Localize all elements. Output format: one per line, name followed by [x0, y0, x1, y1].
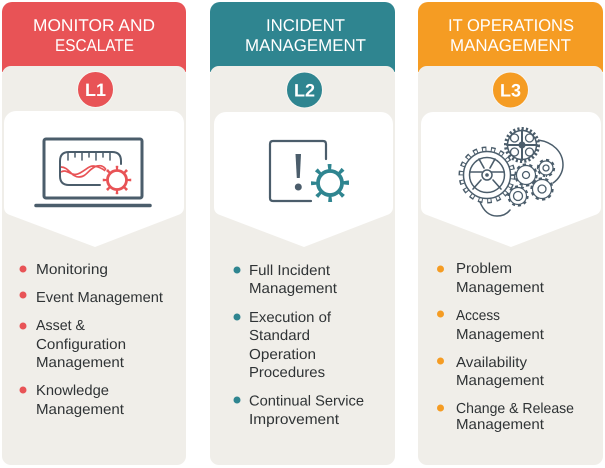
L1 list: Asset &: [36, 318, 85, 334]
L2 list: Management: [249, 281, 337, 297]
small gear lower right: [532, 178, 552, 200]
small gear bottom: [508, 186, 528, 206]
L2 white icon panel: [214, 112, 393, 247]
L3 list: Change & Release: [456, 401, 574, 417]
L1 list: Monitoring: [36, 262, 108, 278]
L2 heading: [245, 16, 366, 55]
top gear: [505, 128, 539, 162]
big gear: [461, 149, 513, 201]
L3 list: [437, 261, 574, 433]
L3 badge: [492, 72, 528, 108]
L2 badge: L2: [294, 80, 315, 100]
L3 list: Access: [456, 308, 500, 324]
L3 heading: MANAGEMENT: [450, 36, 571, 55]
icon: alert document with gear: [270, 141, 346, 201]
L3 list: Management: [456, 280, 544, 296]
panel: L1 monitor and escalate: [2, 2, 186, 465]
L3 list: Management: [456, 417, 544, 433]
L1 list: Management: [36, 355, 124, 371]
L2 list: Standard: [249, 328, 310, 344]
L1 list: Event Management: [36, 290, 163, 306]
L3 list: Availability: [456, 355, 528, 371]
small gear right: [538, 160, 554, 176]
L1 badge: L1: [85, 80, 106, 100]
L2 heading: INCIDENT: [266, 16, 345, 35]
L1 list: [20, 262, 163, 418]
L2 list: Improvement: [249, 412, 339, 428]
L3 list: Problem: [456, 261, 512, 277]
L1 list: Management: [36, 402, 124, 418]
L2 list: Operation: [249, 347, 316, 363]
L2 list: Continual Service: [249, 394, 364, 410]
L1 white icon panel: [4, 111, 184, 247]
L3 header band: [418, 2, 603, 72]
L1 list: Knowledge: [36, 383, 109, 399]
L1 list: Configuration: [36, 337, 126, 353]
L1 heading: MONITOR AND: [33, 16, 155, 35]
panel: L2 incident management: [210, 2, 395, 465]
L2 body background: [210, 66, 395, 465]
L2 list: [234, 263, 364, 428]
L1 header band: [2, 2, 186, 72]
L3 heading: [448, 16, 574, 55]
L2 header band: [210, 2, 395, 72]
L3 body background: [418, 66, 603, 465]
L2 list: Execution of: [249, 310, 332, 326]
L3 list: Management: [456, 373, 544, 389]
icon: cluster of gears: [461, 128, 563, 216]
L1 badge: [78, 72, 114, 108]
L2 list: Procedures: [249, 365, 325, 381]
L3 list: Management: [456, 327, 544, 343]
small gear center: [516, 164, 536, 186]
icon: laptop with monitoring chart and gear: [36, 139, 150, 206]
L3 white icon panel: [421, 112, 601, 247]
L1 heading: ESCALATE: [55, 36, 134, 55]
L3 badge: L3: [500, 80, 521, 100]
panel: L3 IT operations management: [418, 2, 603, 465]
L1 body background: [2, 66, 186, 465]
L3 heading: IT OPERATIONS: [448, 16, 574, 35]
L2 badge: [286, 72, 322, 108]
L2 list: Full Incident: [249, 263, 330, 279]
L2 heading: MANAGEMENT: [245, 36, 366, 55]
L1 heading: [33, 16, 155, 55]
